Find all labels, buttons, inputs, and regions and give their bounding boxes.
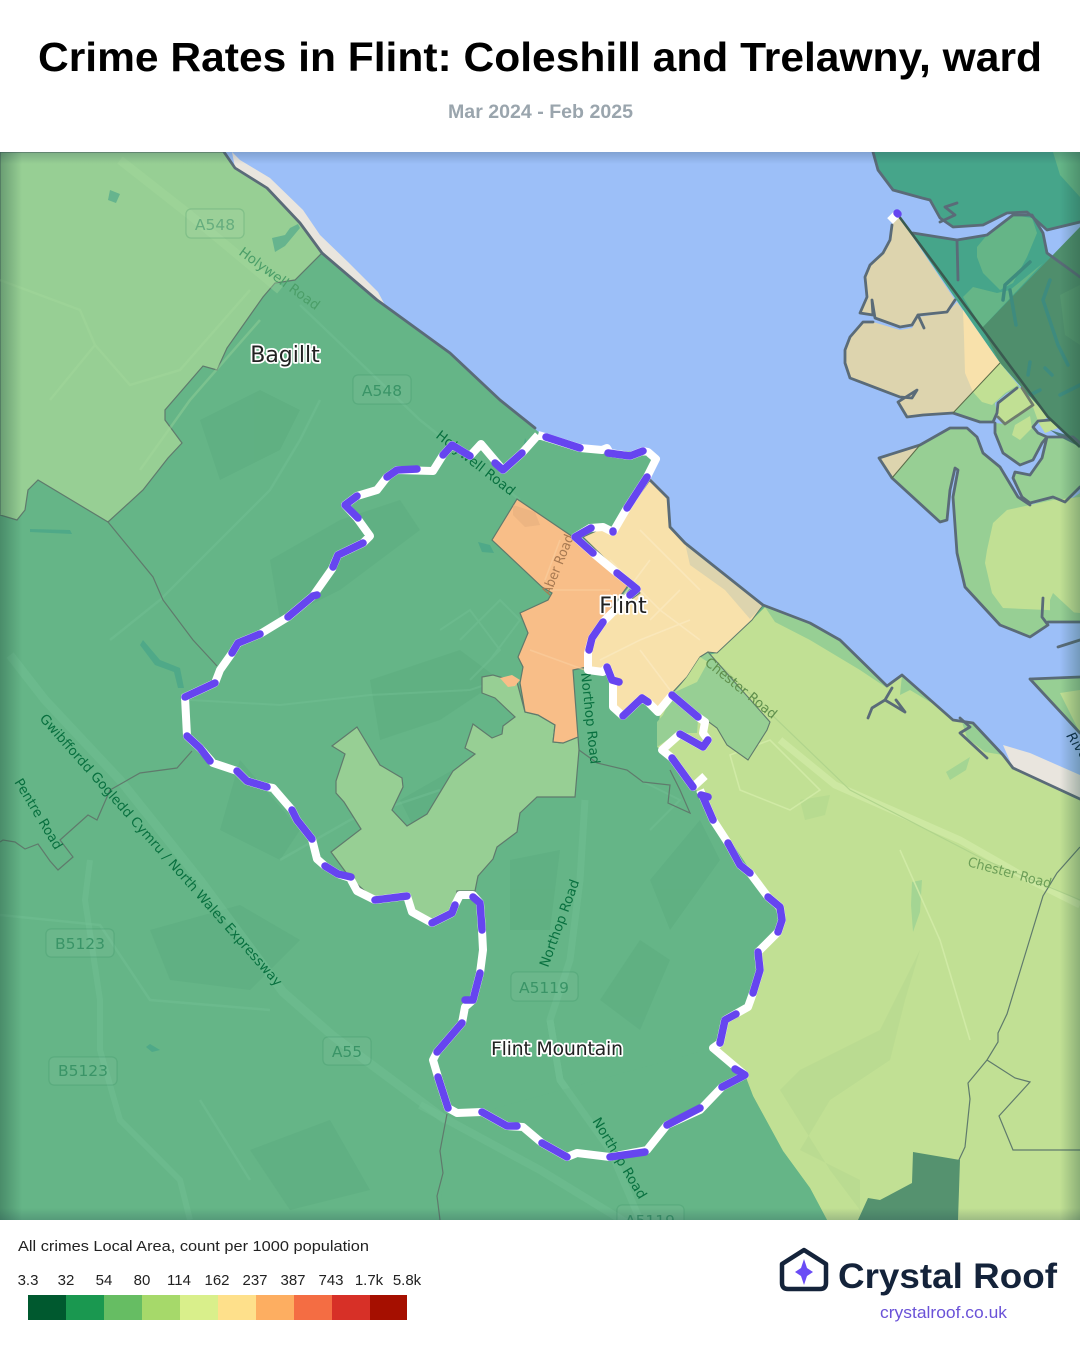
upper-right land <box>873 152 1080 230</box>
road shields: A55 <box>332 1043 362 1061</box>
region: south-east dark patch <box>858 1152 960 1220</box>
choropleth map <box>0 152 1080 1220</box>
island B <box>1013 437 1080 503</box>
road labels: Chester Road <box>701 655 780 722</box>
subtitle: date range: Mar 2024 - Feb 2025 <box>448 102 633 123</box>
road labels: Chester Road <box>966 854 1053 892</box>
south Flint boundary <box>0 522 690 1220</box>
logo: Crystal Roof <box>780 1248 1058 1322</box>
legend values: 162 <box>204 1272 230 1289</box>
legend values <box>18 1272 422 1289</box>
green pie in blob <box>1050 593 1080 622</box>
beach strip on cream <box>685 543 763 619</box>
east region details <box>720 607 1080 1210</box>
road shields: A548 <box>362 382 402 400</box>
pale wedge patch <box>973 363 1018 405</box>
orange detail patch <box>513 505 540 527</box>
road shields: A548 <box>195 216 235 234</box>
legend values: 237 <box>242 1272 268 1289</box>
pale blob in marsh <box>985 497 1080 613</box>
lower marsh green patch <box>963 263 1043 328</box>
base land: mid green <box>0 152 1080 1220</box>
orange nub <box>500 675 520 687</box>
marsh green blobs <box>977 215 1037 290</box>
place labels: Bagillt <box>250 343 320 368</box>
road labels: Gwibffordd Gogledd Cymru / North Wales Expressway <box>36 711 285 990</box>
road labels: Northop Road <box>577 672 603 765</box>
small green strip <box>657 695 698 747</box>
green patch upper-right <box>1053 152 1080 197</box>
icon: house with star <box>782 1250 826 1289</box>
olive patch in overlay <box>1060 285 1080 345</box>
beige triangle <box>879 445 920 478</box>
legend <box>18 1238 422 1320</box>
cream wedge <box>963 310 1000 392</box>
region: south-east mid green <box>440 1048 827 1220</box>
place labels <box>250 343 647 1060</box>
legend values: 80 <box>134 1272 150 1289</box>
place labels: Flint <box>599 594 647 619</box>
region: Chester Road ward <box>672 652 770 760</box>
region: central Flint orange <box>492 499 630 743</box>
legend values: 32 <box>58 1272 74 1289</box>
west peninsula: lower lobe <box>845 302 1000 417</box>
map edge vignette <box>0 152 1080 1220</box>
legend values: 387 <box>280 1272 306 1289</box>
boundary lines east <box>958 847 1080 1162</box>
legend colour scale <box>28 1295 407 1320</box>
island A pale patch <box>1012 416 1032 440</box>
dark overlay square <box>982 227 1080 447</box>
ward boundary: purple dashes <box>185 213 898 1157</box>
lower terrain details <box>420 1020 640 1225</box>
wedge south of cream <box>953 363 1020 422</box>
legend values: 743 <box>318 1272 344 1289</box>
road shields: A5119 <box>519 979 569 997</box>
road labels: Northop Road <box>537 877 583 969</box>
region: Flint town cream <box>583 480 763 715</box>
road labels: Holywell Road <box>236 244 323 314</box>
Flint street grid <box>530 530 700 690</box>
legend values: 1.7k <box>355 1272 384 1289</box>
url: crystalroof.co.uk <box>880 1304 1008 1322</box>
legend values: 3.3 <box>18 1272 38 1289</box>
legend title: All crimes Local Area, count per 1000 population <box>18 1238 369 1255</box>
marsh creeks <box>1003 262 1080 395</box>
road shields: B5123 <box>55 935 105 953</box>
terrain shading and roads <box>0 160 720 1225</box>
road shields: B5123 <box>58 1062 108 1080</box>
title: Crime Rates in Flint: Coleshill and Trelawny, ward <box>38 34 1042 80</box>
road labels: Pentre Road <box>11 776 65 853</box>
pale patch <box>675 657 708 692</box>
road labels: Aber Road <box>539 532 578 597</box>
legend values: 54 <box>96 1272 112 1289</box>
ward boundary: white base line <box>185 213 898 1157</box>
estuary coast lines <box>224 152 1080 799</box>
band between creeks <box>998 388 1048 433</box>
wordmark: Crystal Roof <box>838 1257 1057 1296</box>
road labels: Holywell Road <box>433 428 518 499</box>
pale piece of wedge <box>1060 690 1080 733</box>
region: east pale green <box>657 607 1080 1220</box>
lower right wedge <box>1030 677 1080 733</box>
road labels <box>11 244 1080 1202</box>
dark blue-grey marsh tip <box>1050 430 1080 447</box>
beach shingle <box>232 152 1080 799</box>
estuary teal marsh <box>898 215 1080 447</box>
water: Dee estuary <box>224 152 1080 799</box>
island A <box>995 407 1047 465</box>
small strip <box>1038 420 1058 433</box>
region: Flint Mountain light green <box>331 675 579 923</box>
lower-right marsh <box>879 428 1080 637</box>
legend values: 5.8k <box>393 1272 422 1289</box>
west peninsula: upper lobe <box>860 215 955 327</box>
region: north-west light green <box>0 152 322 522</box>
legend values: 114 <box>167 1272 191 1289</box>
road labels: Northop Road <box>589 1115 650 1202</box>
place labels: Flint Mountain <box>491 1038 623 1060</box>
road shields <box>46 209 684 1234</box>
